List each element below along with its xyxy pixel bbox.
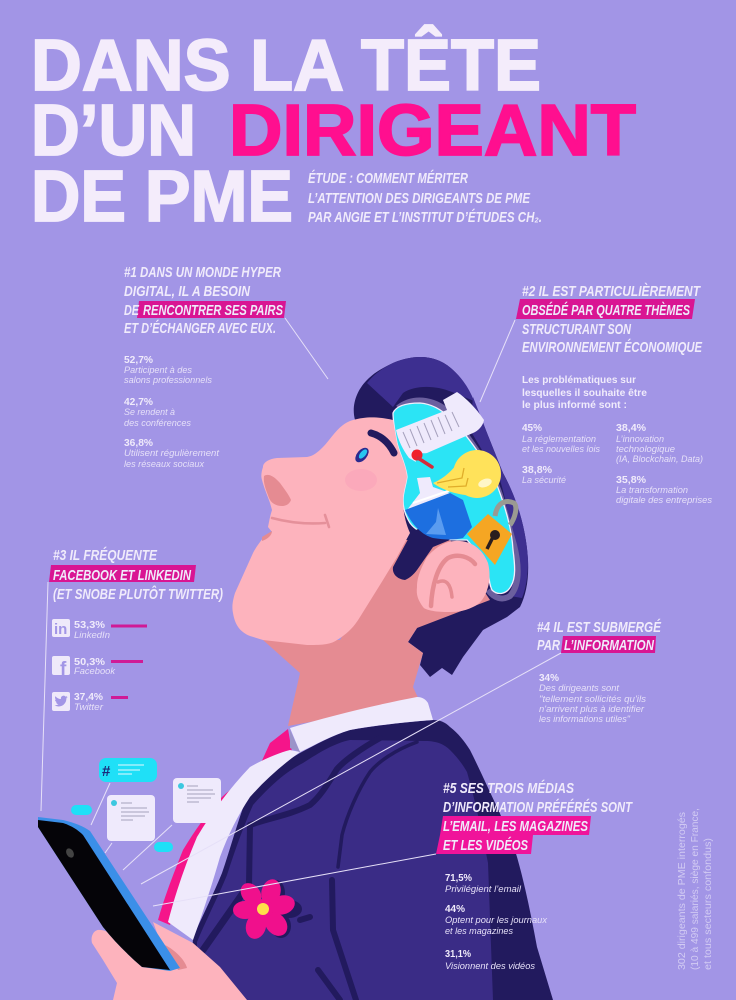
stats: des conférences xyxy=(124,418,192,428)
stats right: technologique xyxy=(616,444,675,454)
methodology note: 302 dirigeants de PME interrogés xyxy=(677,812,688,970)
heading xyxy=(49,547,223,603)
stats left: La sécurité xyxy=(522,475,566,485)
heading: DIGITAL, IL A BESOIN xyxy=(124,283,251,300)
stats left: La réglementation xyxy=(522,434,596,444)
eye xyxy=(353,445,371,465)
phone xyxy=(38,817,180,971)
brain cavity xyxy=(393,401,518,598)
social post: card 2 xyxy=(173,778,221,823)
row: Facebook: f xyxy=(60,659,67,680)
row: Facebook: 50,3% xyxy=(74,657,105,668)
hair xyxy=(354,357,528,677)
panel: #3 social networks xyxy=(49,547,223,712)
stats: 42,7% xyxy=(124,397,153,408)
heading: D’INFORMATION PRÉFÉRÉS SONT xyxy=(443,799,633,816)
icon: envelope xyxy=(407,477,450,510)
heading: PAR xyxy=(537,637,560,654)
heading: STRUCTURANT SON xyxy=(522,321,632,338)
stat: "tellement sollicités qu'ils xyxy=(539,694,647,704)
subtitle: PAR ANGIE ET L’INSTITUT D’ÉTUDES CH₂. xyxy=(308,209,542,226)
stats: 36,8% xyxy=(124,438,153,449)
row: LinkedIn xyxy=(52,619,147,640)
stats left: et les nouvelles lois xyxy=(522,444,600,454)
blush xyxy=(345,469,377,491)
stats: 31,1% xyxy=(445,949,471,960)
stats: 44% xyxy=(445,904,465,915)
icon: light bulb xyxy=(433,450,501,498)
panel: #2 themes xyxy=(516,283,713,505)
subtitle: L’ATTENTION DES DIRIGEANTS DE PME xyxy=(308,190,531,207)
heading xyxy=(436,780,633,854)
subtitle: ÉTUDE : COMMENT MÉRITER xyxy=(308,170,468,187)
stats: 71,5% xyxy=(445,873,472,884)
intro text: lesquelles il souhaite être xyxy=(522,387,647,399)
methodology note: (10 à 499 salariés, siège en France, xyxy=(690,808,701,970)
heading: L’INFORMATION xyxy=(564,637,655,654)
stats right xyxy=(616,423,713,505)
stats right: L’innovation xyxy=(616,434,664,444)
mouth xyxy=(272,515,329,527)
stats right: digitale des entreprises xyxy=(616,495,713,505)
heading: #3 IL FRÉQUENTE xyxy=(53,547,158,564)
row: Twitter: 37,4% xyxy=(74,692,103,703)
stats: salons professionnels xyxy=(124,375,212,385)
row: LinkedIn: 53,3% xyxy=(74,620,105,631)
stats right: (IA, Blockchain, Data) xyxy=(616,454,703,464)
title: D’UN xyxy=(31,91,196,171)
heading xyxy=(516,283,703,356)
stats: Participent à des xyxy=(124,365,192,375)
panel: #5 media xyxy=(436,780,633,971)
stats: Optent pour les journaux xyxy=(445,915,548,925)
stats: 52,7% xyxy=(124,355,153,366)
stats: les réseaux sociaux xyxy=(124,459,204,469)
heading: ET D’ÉCHANGER AVEC EUX. xyxy=(124,320,276,337)
stat: n'arrivent plus à identifier xyxy=(539,704,645,714)
stats: Visionnent des vidéos xyxy=(445,961,536,971)
ear xyxy=(417,541,490,612)
stat: Des dirigeants sont xyxy=(539,683,620,693)
intro text: Les problématiques sur xyxy=(522,374,636,386)
collar xyxy=(290,697,433,752)
title: DIRIGEANT xyxy=(229,91,636,171)
icon: paper scroll xyxy=(396,392,484,462)
illustration: businessman xyxy=(38,357,553,1000)
row: Twitter: Twitter xyxy=(74,702,104,712)
subtitle xyxy=(308,170,542,226)
row: LinkedIn: LinkedIn xyxy=(74,630,110,640)
stats right: 38,4% xyxy=(616,423,646,434)
methodology note: et tous secteurs confondus) xyxy=(703,838,714,970)
cyan pills xyxy=(71,805,173,852)
stats left xyxy=(522,423,600,485)
row: Facebook: Facebook xyxy=(74,666,116,676)
social post: hashtag bubble: # xyxy=(102,763,111,780)
nostril xyxy=(264,475,291,506)
icon: blue screen xyxy=(405,490,472,540)
heading: ET LES VIDÉOS xyxy=(443,837,528,854)
row: Facebook xyxy=(52,656,143,680)
stats right: 35,8% xyxy=(616,475,646,486)
social post: hashtag bubble xyxy=(99,758,157,782)
stats right: La transformation xyxy=(616,485,688,495)
stats xyxy=(445,873,548,971)
heading: RENCONTRER SES PAIRS xyxy=(143,302,283,319)
stat xyxy=(539,673,647,724)
neck xyxy=(263,540,490,726)
heading: DE xyxy=(124,302,140,319)
heading: #4 IL EST SUBMERGÉ xyxy=(537,619,662,636)
title xyxy=(31,25,636,237)
methodology note xyxy=(677,808,714,970)
stats: et les magazines xyxy=(445,926,513,936)
pink tie xyxy=(158,729,292,925)
title: DE PME xyxy=(31,157,293,237)
icon: flower xyxy=(233,877,310,941)
heading: (ET SNOBE PLUTÔT TWITTER) xyxy=(53,585,223,603)
heading xyxy=(124,264,286,337)
heading: #1 DANS UN MONDE HYPER xyxy=(124,264,281,281)
panel: #4 information xyxy=(537,619,662,724)
stats left: 45% xyxy=(522,423,542,434)
phone signal lines xyxy=(91,783,172,870)
stats left: 38,8% xyxy=(522,465,552,476)
eyebrow xyxy=(371,433,394,453)
shirt xyxy=(168,750,300,940)
icon: red pin xyxy=(412,450,432,467)
heading: L’EMAIL, LES MAGAZINES xyxy=(443,818,588,835)
row: LinkedIn: in xyxy=(54,621,67,638)
stats: Privilégient l’email xyxy=(445,884,522,894)
stats: Utilisent régulièrement xyxy=(124,448,220,458)
intro text xyxy=(522,374,647,411)
sideburn xyxy=(393,528,450,580)
heading: FACEBOOK ET LINKEDIN xyxy=(53,567,192,584)
panel: #1 pairs xyxy=(124,264,286,469)
leader lines xyxy=(41,318,561,906)
stats: Se rendent à xyxy=(124,407,175,417)
icon: padlock xyxy=(467,502,516,565)
face xyxy=(232,417,410,645)
social post: card 1 xyxy=(107,795,155,841)
lip xyxy=(262,531,272,541)
row: Twitter xyxy=(52,692,128,712)
jacket xyxy=(190,720,553,1000)
heading xyxy=(537,619,662,654)
heading: #5 SES TROIS MÉDIAS xyxy=(443,780,574,797)
title: DANS LA TÊTE xyxy=(31,25,541,106)
stats xyxy=(124,355,220,469)
hand xyxy=(92,922,247,1000)
stat: 34% xyxy=(539,673,559,684)
stat: les informations utiles" xyxy=(539,714,631,724)
intro text: le plus informé sont : xyxy=(522,399,627,411)
